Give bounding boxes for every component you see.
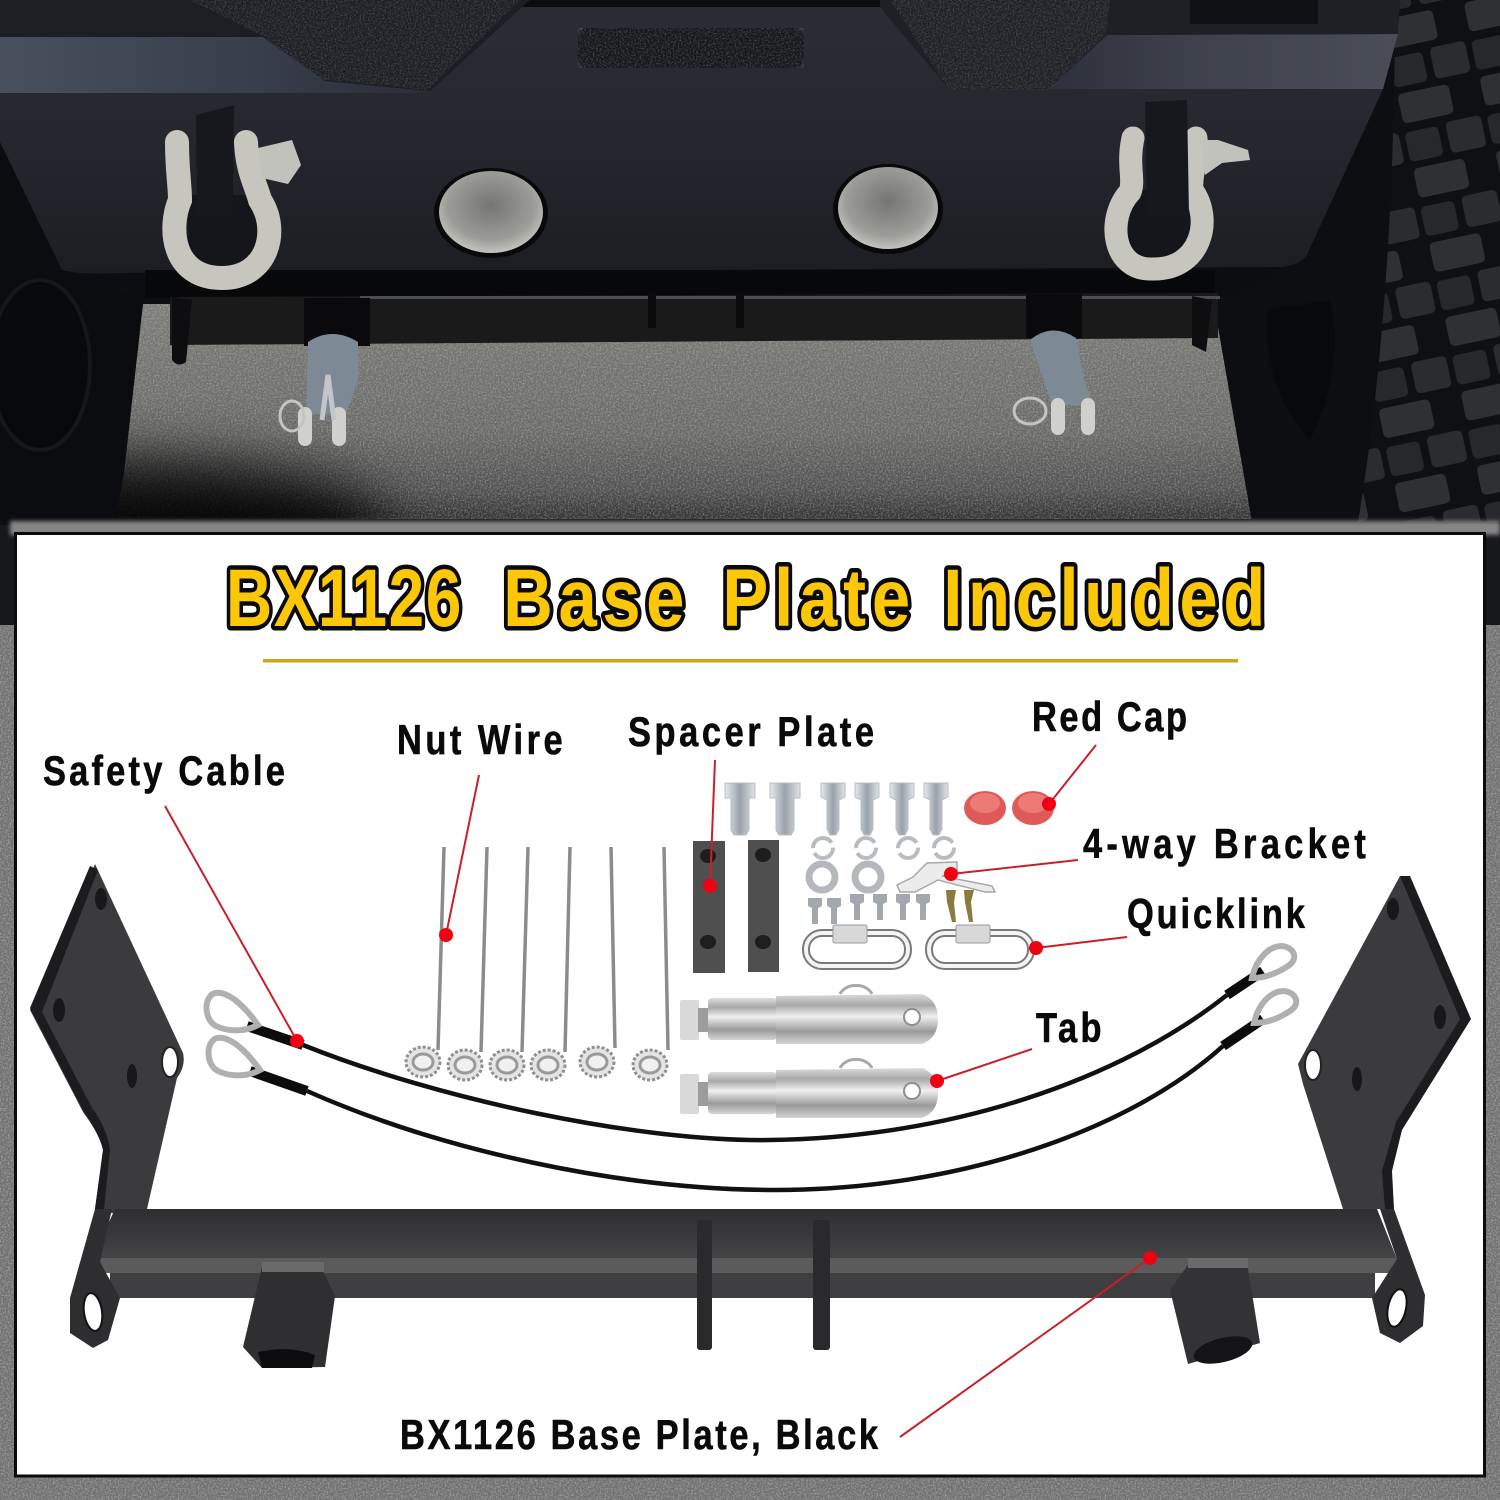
left ear (70, 1209, 120, 1348)
label: spacer plate: Spacer Plate (628, 709, 874, 756)
left tire (0, 140, 145, 522)
title: Included (943, 552, 1271, 644)
white panel (16, 534, 1484, 1476)
callout: safety cable (165, 806, 304, 1048)
title: Plate (722, 552, 916, 644)
label: quicklink: Quicklink (1127, 891, 1306, 938)
upper cable (206, 946, 1294, 1140)
nut wires (406, 847, 668, 1080)
callout: nut wire (439, 775, 479, 942)
lower cable (208, 991, 1296, 1190)
left mounting plate (30, 864, 184, 1215)
right ear (1372, 1209, 1425, 1343)
base plate crossbar (170, 292, 1220, 365)
right shackle wing nut (1200, 140, 1250, 175)
callout: base plate (900, 1251, 1157, 1437)
light strip at photo bottom (10, 521, 1500, 535)
title underline (263, 659, 1238, 662)
label: nut wire: Nut Wire (397, 717, 563, 764)
left D-ring shackle (174, 142, 269, 278)
safety cables (206, 946, 1296, 1190)
cross tube (92, 1209, 1397, 1298)
hardware bolts (725, 783, 948, 835)
top left grille texture (0, 0, 530, 91)
left upper highlight band (0, 37, 430, 93)
top right grille texture (880, 0, 1400, 90)
spacer plates (693, 840, 779, 973)
callout lines and dots (165, 745, 1157, 1437)
quicklinks (806, 925, 1031, 966)
title (226, 551, 1271, 644)
left strap (196, 105, 234, 215)
right tow pin (1014, 294, 1094, 428)
label: base plate: BX1126 Base Plate, Black (400, 1412, 879, 1459)
callout: red cap (1042, 745, 1096, 811)
label: tab: Tab (1036, 1005, 1102, 1052)
left receiver (243, 1262, 335, 1368)
callout: spacer plate (703, 760, 717, 893)
right D-ring shackle (1116, 138, 1202, 269)
center tabs (697, 1220, 830, 1350)
right fog light (833, 164, 943, 254)
red caps (964, 791, 1054, 825)
tow tabs (680, 985, 938, 1118)
asphalt ground (118, 304, 1252, 519)
callout: quicklink (1029, 937, 1127, 955)
right strap (1145, 100, 1189, 215)
label: red cap: Red Cap (1032, 694, 1187, 741)
small screws (808, 890, 974, 924)
photo: front bumper with installed base plate (0, 0, 1500, 538)
right upper highlight band (1049, 34, 1398, 89)
4-way bracket (897, 862, 995, 892)
callout: 4-way bracket (944, 860, 1078, 881)
left fog light (434, 168, 548, 258)
label: 4-way bracket: 4-way Bracket (1083, 821, 1366, 868)
right tire (1214, 0, 1500, 522)
left shackle pin nut (258, 140, 301, 184)
title: BX1126 (226, 551, 463, 644)
callout: tab (930, 1049, 1032, 1088)
right receiver (1170, 1258, 1260, 1369)
left tow pin (280, 298, 370, 439)
washers (809, 838, 954, 890)
title: Base (503, 552, 690, 644)
blurred photo background behind the panel (0, 525, 1500, 1500)
base plate bracket (30, 864, 1471, 1369)
label: safety cable: Safety Cable (43, 748, 285, 795)
right mounting plate (1298, 876, 1471, 1209)
shadow under bumper (145, 270, 1215, 298)
winch plate slot (578, 28, 804, 68)
bumper body (0, 7, 1398, 274)
